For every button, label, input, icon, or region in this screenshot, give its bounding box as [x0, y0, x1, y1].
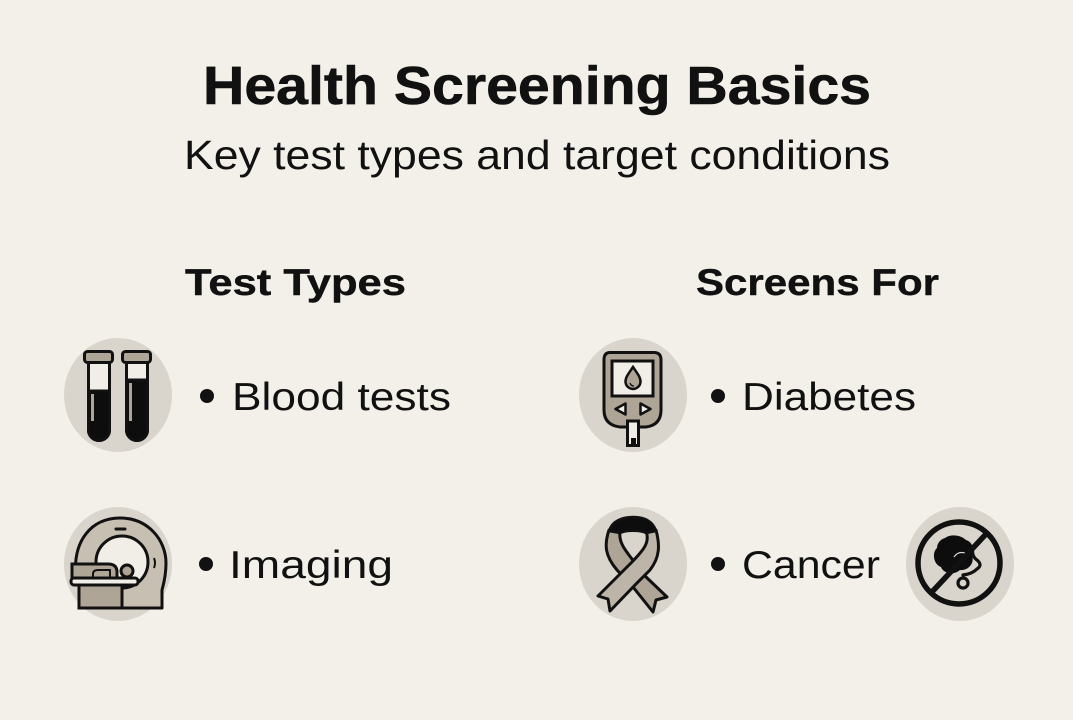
bullet: imaging: [199, 557, 213, 571]
label: imaging: Imaging: [229, 544, 393, 587]
label: blood tests: Blood tests: [232, 376, 451, 419]
bullet: blood tests: [200, 389, 214, 403]
icon: no tumour symbol: [906, 507, 1014, 621]
subtitle: Key test types and target conditions: [184, 132, 890, 178]
icon: blood test tubes: [64, 338, 172, 452]
heading: screens for: Screens For: [696, 262, 939, 303]
bullet: diabetes: [711, 389, 725, 403]
icon: glucose meter: [579, 338, 687, 452]
bullet: cancer: [711, 557, 725, 571]
icon: MRI scanner: [64, 507, 172, 621]
icon: awareness ribbon: [579, 507, 687, 621]
label: cancer: Cancer: [742, 544, 880, 587]
heading: test types: Test Types: [185, 262, 406, 303]
label: diabetes: Diabetes: [742, 376, 916, 419]
title: Health Screening Basics: [203, 56, 871, 116]
